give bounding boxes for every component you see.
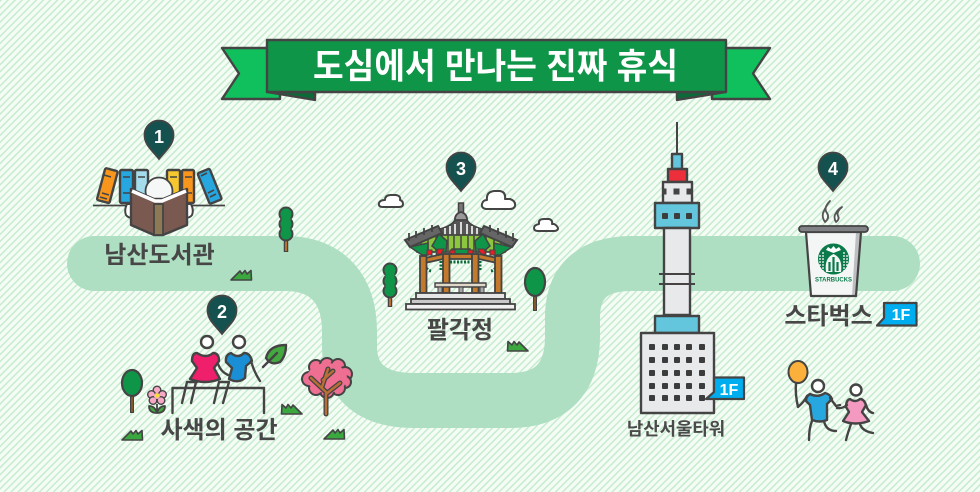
- pin 1: [144, 120, 174, 159]
- eaves: [405, 226, 517, 247]
- columns: [420, 254, 502, 293]
- 1F tag: [706, 378, 744, 399]
- green roof panel: [412, 235, 510, 252]
- table: [435, 283, 486, 287]
- pin 2: 2: [217, 302, 227, 322]
- cup: [799, 226, 868, 296]
- pin 3: 3: [456, 159, 466, 179]
- pin 3: [446, 153, 476, 191]
- books: [97, 168, 222, 204]
- panel: contemplation space: [122, 296, 352, 444]
- clouds: [379, 191, 558, 231]
- steps: [416, 293, 505, 299]
- reader head: [146, 178, 172, 204]
- label: 팔각정: [427, 317, 493, 344]
- title ribbon: [222, 40, 770, 100]
- title text: 도심에서 만나는 진짜 휴식: [313, 48, 678, 86]
- label: 스타벅스: [784, 303, 873, 330]
- tree: top right of library: [280, 208, 292, 252]
- grass: [282, 404, 302, 414]
- 1F tag: [877, 303, 916, 326]
- pin 1: 1: [154, 127, 164, 147]
- red ornament: [427, 249, 495, 255]
- steam: [823, 201, 842, 222]
- pavilion: [405, 203, 517, 310]
- label: 남산도서관: [104, 242, 215, 269]
- grass: [508, 342, 528, 351]
- label: 남산서울타워: [627, 419, 725, 439]
- panel: Starbucks: [784, 152, 916, 330]
- cup: STARBUCKS: [815, 276, 853, 284]
- panel: N Seoul Tower: [627, 122, 744, 439]
- hands: [125, 204, 193, 218]
- icon: leaf: [263, 345, 286, 367]
- panel: library: [93, 120, 225, 269]
- pin 4: [818, 152, 848, 191]
- 1F tag: 1F: [892, 307, 911, 324]
- shelf line: [93, 204, 225, 206]
- grass: [122, 430, 142, 440]
- tree: right of pavilion: [525, 268, 545, 311]
- pin 4: 4: [828, 159, 838, 179]
- panel: Palgakjeong pavilion: [379, 153, 558, 344]
- road: winding green path: [94, 264, 892, 400]
- book: [131, 189, 187, 235]
- grass: [324, 430, 344, 439]
- icon: flower: [148, 386, 166, 413]
- label: 사색의 공간: [160, 417, 278, 444]
- pin 2: [208, 296, 236, 334]
- Starbucks logo: [818, 244, 849, 274]
- beam: [425, 254, 497, 263]
- grass: [231, 270, 252, 280]
- tree: left of pavilion: [384, 264, 396, 307]
- 1F tag: 1F: [720, 382, 739, 399]
- tree: left: [122, 370, 142, 413]
- illustration: family with balloon: [788, 361, 873, 440]
- upper roof: [434, 220, 488, 241]
- tree: pink blossom: [302, 358, 352, 414]
- couple on bench: [172, 336, 264, 413]
